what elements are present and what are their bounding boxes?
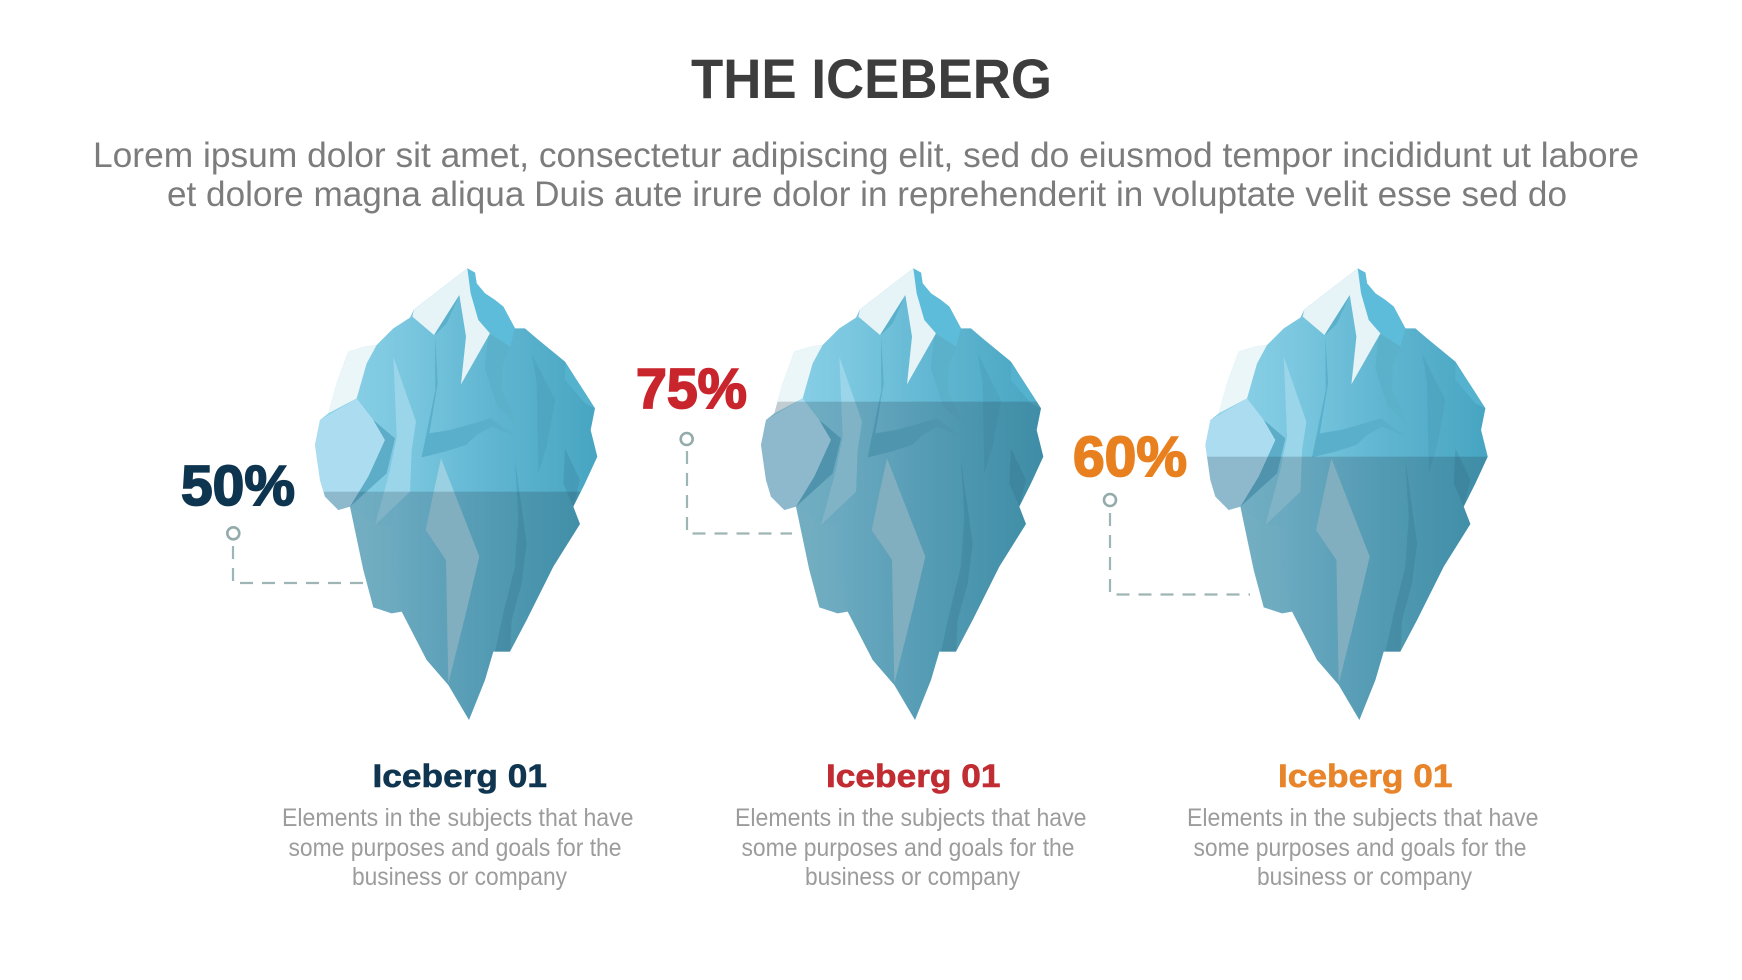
percentage 60%: 60% [1073, 425, 1187, 489]
connector 1 [227, 527, 363, 583]
iceberg 2 at 75% [753, 268, 1053, 725]
title: THE ICEBERG [691, 47, 1052, 110]
caption 3: Elements in the subjects that have [1187, 804, 1538, 832]
subtitle text: Lorem ipsum dolor sit amet, consectetur adipiscing elit, sed do eiusmod tempor incididunt ut labore [93, 136, 1639, 175]
percentage 75%: 75% [636, 357, 747, 421]
caption 3: some purposes and goals for the [1194, 834, 1526, 862]
caption 3: Iceberg 01 [1278, 758, 1452, 794]
caption 2: Iceberg 01 [826, 758, 1000, 794]
caption 3 [1187, 758, 1538, 891]
subtitle text: et dolore magna aliqua Duis aute irure dolor in reprehenderit in voluptate velit esse sed do [167, 175, 1567, 214]
subtitle text [93, 136, 1639, 214]
caption 1: some purposes and goals for the [288, 834, 622, 862]
percentage 50%: 50% [181, 454, 295, 518]
connector 3 [1104, 494, 1250, 594]
connector 2 [681, 433, 792, 534]
caption 2 [735, 758, 1086, 891]
caption 1 [282, 758, 634, 891]
caption 1: Iceberg 01 [372, 758, 547, 794]
caption 1: Elements in the subjects that have [282, 804, 634, 832]
caption 2: business or company [805, 863, 1020, 891]
iceberg 1 at 50% [307, 268, 607, 725]
caption 1: business or company [352, 863, 567, 891]
caption 3: business or company [1257, 863, 1472, 891]
iceberg 3 at 60% [1197, 268, 1497, 727]
caption 2: some purposes and goals for the [742, 834, 1074, 862]
caption 2: Elements in the subjects that have [735, 804, 1086, 832]
